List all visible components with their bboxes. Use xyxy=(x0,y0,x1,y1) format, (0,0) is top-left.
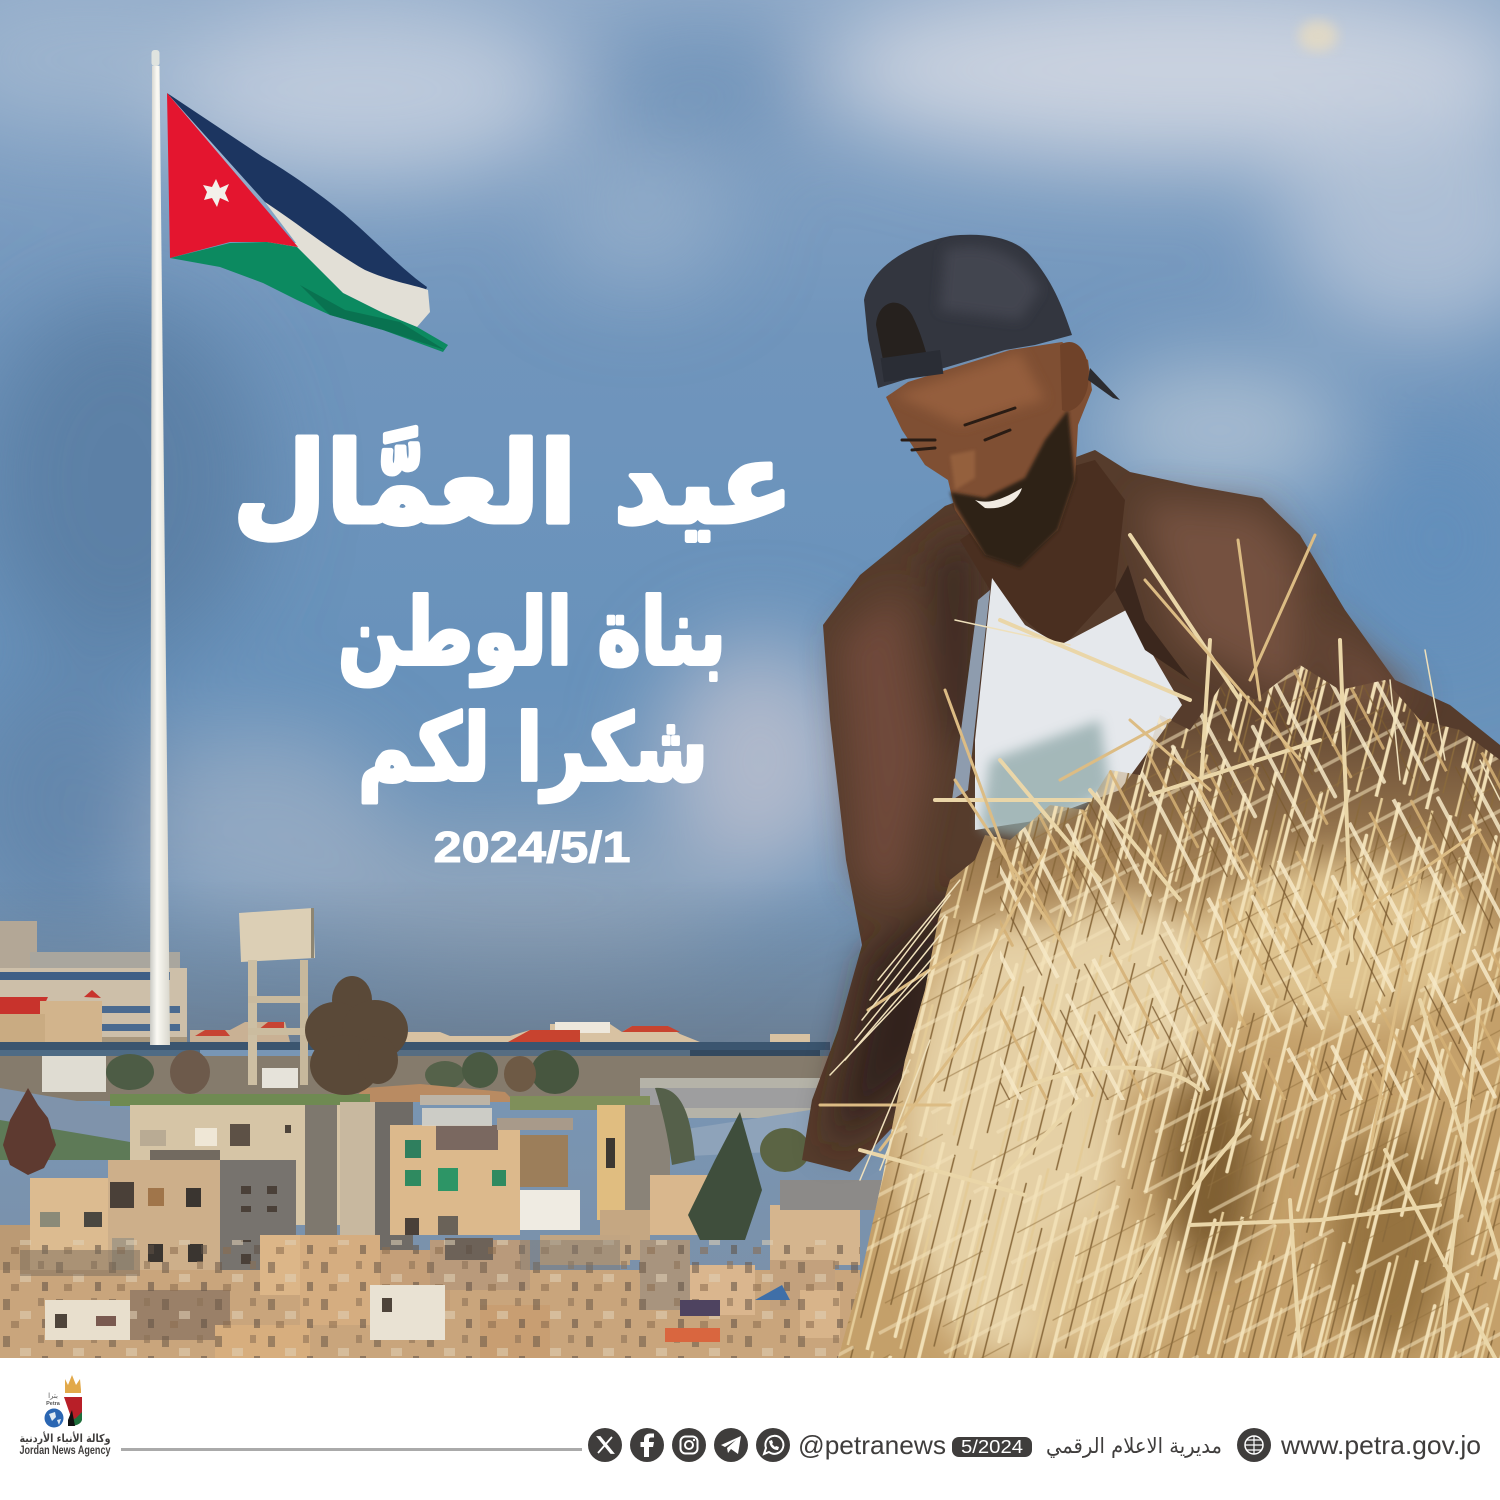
ear xyxy=(1060,342,1089,411)
city skyline background xyxy=(0,921,830,1160)
face xyxy=(886,342,1092,565)
neck xyxy=(960,460,1125,650)
eyebrows and eyes xyxy=(902,408,1015,450)
petra label: Petra xyxy=(46,1401,61,1407)
wheat sheaf xyxy=(820,535,1500,1360)
subtitle line 1: بناة الوطن xyxy=(338,579,726,687)
footer background xyxy=(0,1358,1500,1500)
petra mark: بترا xyxy=(48,1392,58,1400)
icon: flag star xyxy=(203,179,229,207)
flagpole xyxy=(150,50,170,1045)
icon: crown xyxy=(65,1375,81,1393)
date: 2024/5/1 xyxy=(434,823,630,872)
icon: globe xyxy=(1237,1428,1271,1462)
main title: عيد العمَّال xyxy=(233,419,793,549)
city buildings xyxy=(0,1088,890,1358)
icon: Instagram xyxy=(672,1428,706,1462)
icon: WhatsApp xyxy=(756,1428,790,1462)
Jordanian flag xyxy=(167,93,448,352)
worker xyxy=(802,235,1500,1172)
department name: مديرية الاعلام الرقمي xyxy=(1046,1434,1222,1458)
forehead light xyxy=(895,352,1045,425)
beard xyxy=(950,410,1075,568)
red tree at left xyxy=(3,1088,56,1175)
tree xyxy=(305,976,408,1095)
issue badge: 5/2024 xyxy=(961,1437,1023,1457)
issue badge xyxy=(952,1437,1032,1457)
t-shirt xyxy=(975,578,1182,830)
cap xyxy=(864,235,1072,388)
cap hole xyxy=(876,303,928,370)
footer rule xyxy=(121,1448,582,1451)
jacket xyxy=(802,450,1500,1172)
cap strap xyxy=(881,350,943,382)
icon: X xyxy=(588,1428,622,1462)
icon: flag shield xyxy=(64,1397,82,1426)
smile xyxy=(975,488,1022,508)
agency Arabic name: وكالة الأنباء الأردنية xyxy=(20,1431,111,1445)
cap brim xyxy=(1088,368,1120,400)
icon: Telegram xyxy=(714,1428,748,1462)
collar xyxy=(1115,565,1190,680)
icon: Facebook xyxy=(630,1428,664,1462)
icon: globe xyxy=(44,1408,64,1428)
agency English name: Jordan News Agency xyxy=(20,1445,111,1457)
logo: Petra Jordan News Agency xyxy=(20,1375,111,1457)
social handle: @petranews xyxy=(798,1430,946,1460)
long straws xyxy=(820,535,1500,1358)
nose shadow xyxy=(950,450,975,490)
website: www.petra.gov.jo xyxy=(1280,1430,1481,1460)
subtitle line 2: شكرا لكم xyxy=(358,695,708,803)
shirt placket xyxy=(952,590,990,800)
water tower xyxy=(239,908,315,1088)
